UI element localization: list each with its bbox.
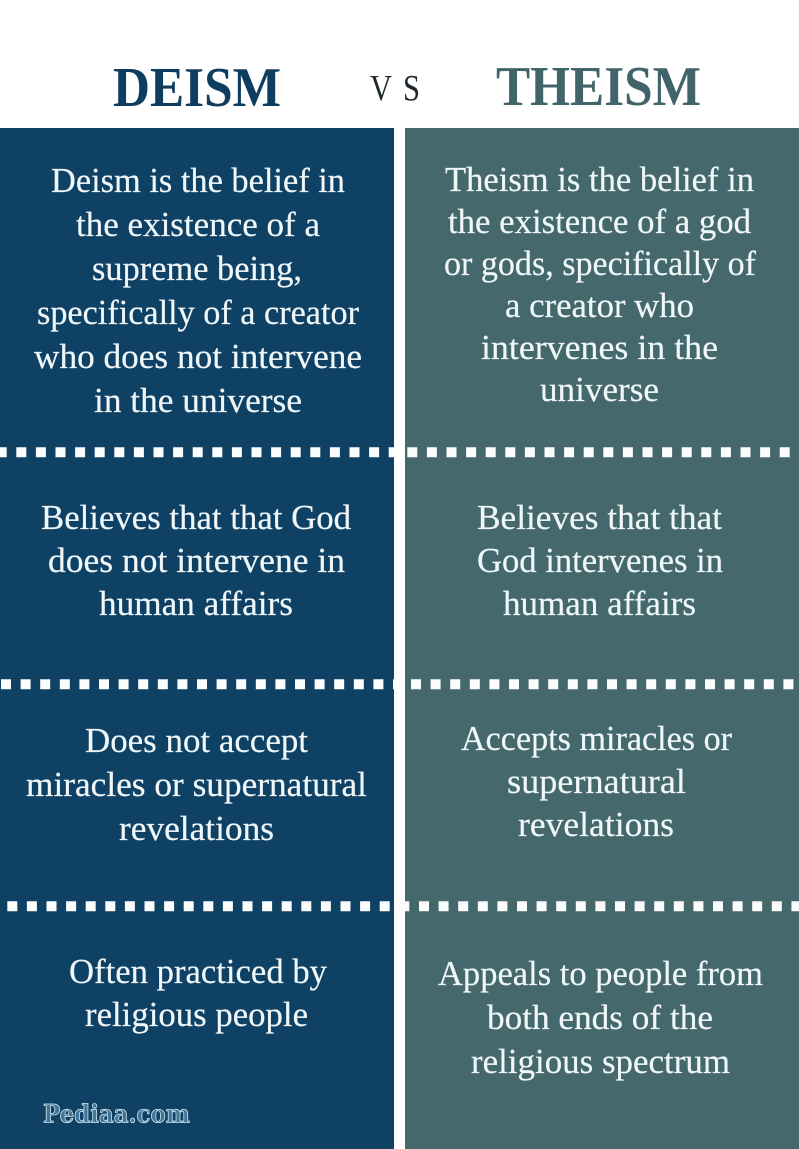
text: theism followers: Appeals to people from <box>438 954 763 993</box>
text: theism followers: both ends of the <box>487 998 713 1037</box>
text: theism definition: universe <box>540 370 659 409</box>
logo: Pediaa.com: Pediaa.com <box>43 1100 190 1128</box>
text: theism on miracles: supernatural <box>507 762 686 801</box>
text: deism definition: the existence of a <box>76 205 320 244</box>
text: deism definition: in the universe <box>94 381 302 420</box>
panel: deism column <box>0 128 394 1149</box>
panel: theism column <box>405 128 799 1149</box>
text: theism definition: intervenes in the <box>481 328 718 367</box>
title: Deism: DEISM <box>113 57 281 119</box>
text: deism on miracles: Does not accept <box>85 721 308 760</box>
text: deism definition: who does not intervene <box>34 337 362 376</box>
text: theism definition: or gods, specifically of <box>444 244 756 283</box>
text: deism on miracles: miracles or supernatural <box>26 765 367 804</box>
title: vs <box>370 68 420 110</box>
text: theism on intervention: Believes that that <box>477 498 722 537</box>
text: deism definition: specifically of a creator <box>37 293 359 332</box>
text: deism on intervention: Believes that that God <box>41 498 351 537</box>
text: theism definition: a creator who <box>505 286 694 325</box>
text: theism definition: the existence of a god <box>448 202 751 241</box>
text: deism definition <box>34 161 362 420</box>
text: theism on intervention: human affairs <box>503 584 696 623</box>
text: theism followers <box>438 954 763 1081</box>
text: deism on miracles <box>26 721 367 848</box>
text: deism followers: religious people <box>85 995 308 1034</box>
text: theism on miracles <box>461 719 732 844</box>
title: vs: S <box>403 68 420 110</box>
text: deism definition: Deism is the belief in <box>51 161 345 200</box>
text: theism definition: Theism is the belief in <box>445 160 754 199</box>
text: deism followers <box>69 952 327 1034</box>
text: theism on intervention <box>477 498 723 623</box>
text: deism followers: Often practiced by <box>69 952 327 991</box>
text: theism on intervention: God intervenes in <box>477 541 723 580</box>
text: theism on miracles: revelations <box>518 805 674 844</box>
text: deism on intervention: does not intervene in <box>48 541 345 580</box>
text: theism followers: religious spectrum <box>471 1042 730 1081</box>
text: deism definition: supreme being, <box>92 249 302 288</box>
title: vs: V <box>370 68 392 110</box>
text: theism definition <box>444 160 756 409</box>
title: Theism: THEISM <box>496 56 701 118</box>
text: theism on miracles: Accepts miracles or <box>461 719 732 758</box>
text: deism on intervention <box>41 498 351 623</box>
text: deism on intervention: human affairs <box>99 584 293 623</box>
text: deism on miracles: revelations <box>119 809 274 848</box>
